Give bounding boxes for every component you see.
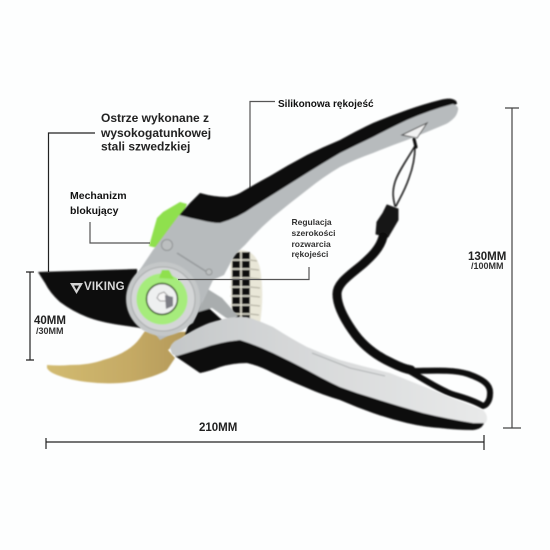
label: adjustment: Regulacja: [292, 217, 332, 227]
heading: blade: Ostrze wykonane z: [101, 111, 209, 125]
icon: lower handle: [170, 317, 487, 430]
icon: lower blade: [47, 331, 190, 383]
dimension: 40mm: 40MM: [34, 315, 66, 327]
icon: upper blade: [38, 269, 141, 328]
dimension: 130mm: /100MM: [471, 261, 504, 271]
callout line: handle: [250, 102, 275, 192]
callout line: blade: [48, 133, 95, 272]
dimension: 130mm: [468, 108, 521, 428]
icon: upper handle: [128, 99, 458, 340]
label: lock mechanism: blokujący: [70, 205, 119, 217]
dimension: 130mm: 130MM: [468, 251, 506, 263]
dimension: 40mm: /30MM: [36, 326, 64, 336]
logo: Viking: VIKING: [84, 281, 125, 293]
icon: green lock lever: [149, 202, 187, 250]
label: adjustment: rozwarcia: [292, 239, 331, 249]
dimension: 40mm: [26, 272, 66, 360]
heading: blade: wysokogatunkowej: [100, 126, 211, 140]
icon: spring: [230, 250, 262, 323]
label: lock mechanism: Mechanizm: [70, 190, 127, 202]
heading: blade: stali szwedzkiej: [101, 140, 190, 154]
icon: pivot hub: [126, 262, 200, 336]
dimension: 210mm: 210MM: [199, 422, 237, 434]
label: adjustment: rękojeści: [292, 249, 328, 259]
icon: lanyard cord: [337, 139, 490, 406]
label: silicone handle: Silikonowa rękojeść: [278, 99, 374, 110]
icon: lanyard hole: [402, 123, 427, 138]
icon: inner link: [185, 288, 238, 335]
label: adjustment: szerokości: [292, 228, 335, 238]
callout line: lock: [90, 222, 150, 243]
callout line: adjustment: [178, 267, 309, 280]
dimension: 210mm: [46, 422, 484, 450]
